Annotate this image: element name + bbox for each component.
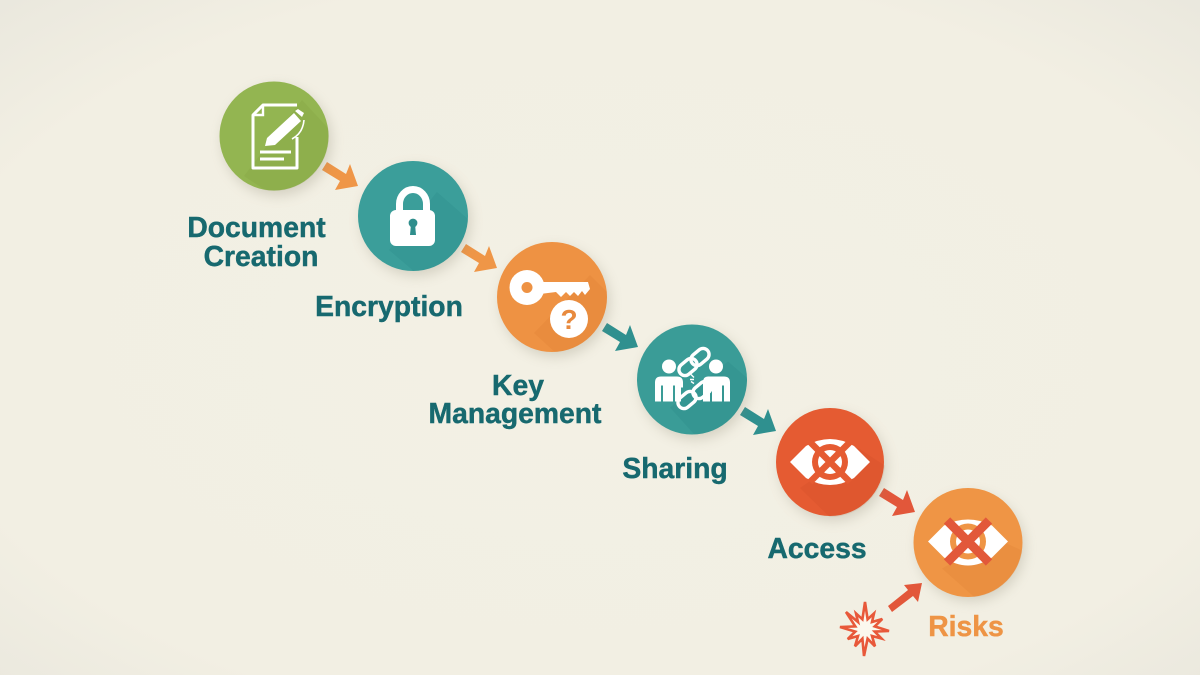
step 5: access icon xyxy=(776,408,890,524)
icon: eye with large cross xyxy=(928,520,1008,566)
icon: padlock xyxy=(390,190,435,246)
arrow: access to risks xyxy=(879,488,915,516)
step 6: risks icon xyxy=(914,488,1028,605)
icon: key xyxy=(510,270,590,305)
step 2: encryption icon xyxy=(358,161,474,280)
icon: crossed eye xyxy=(790,439,870,485)
icon: broken chain xyxy=(675,346,714,411)
step 4: sharing icon xyxy=(636,324,754,444)
label: document creation xyxy=(187,211,326,272)
step 1: document creation icon xyxy=(218,82,336,200)
step 3: key management icon xyxy=(496,242,614,361)
icon: document with pen xyxy=(253,105,304,168)
arrow: threat to risks xyxy=(888,583,922,612)
label: key management: Key xyxy=(492,369,544,401)
label: encryption: Encryption xyxy=(315,290,463,322)
label: key management: Management xyxy=(429,397,602,429)
arrow: key management to sharing xyxy=(602,323,638,351)
label: key management xyxy=(429,369,602,429)
arrow: document creation to encryption xyxy=(322,162,358,190)
icon: question mark badge: ? xyxy=(560,304,578,335)
label: risks: Risks xyxy=(928,610,1004,642)
label: access: Access xyxy=(767,532,867,564)
arrow: sharing to access xyxy=(740,407,776,435)
arrow: encryption to key management xyxy=(461,244,497,272)
label: document creation: Document xyxy=(187,211,326,243)
icon: two people xyxy=(655,360,730,402)
label: sharing: Sharing xyxy=(622,452,728,484)
label: document creation: Creation xyxy=(204,240,318,272)
icon: threat starburst xyxy=(840,602,889,656)
